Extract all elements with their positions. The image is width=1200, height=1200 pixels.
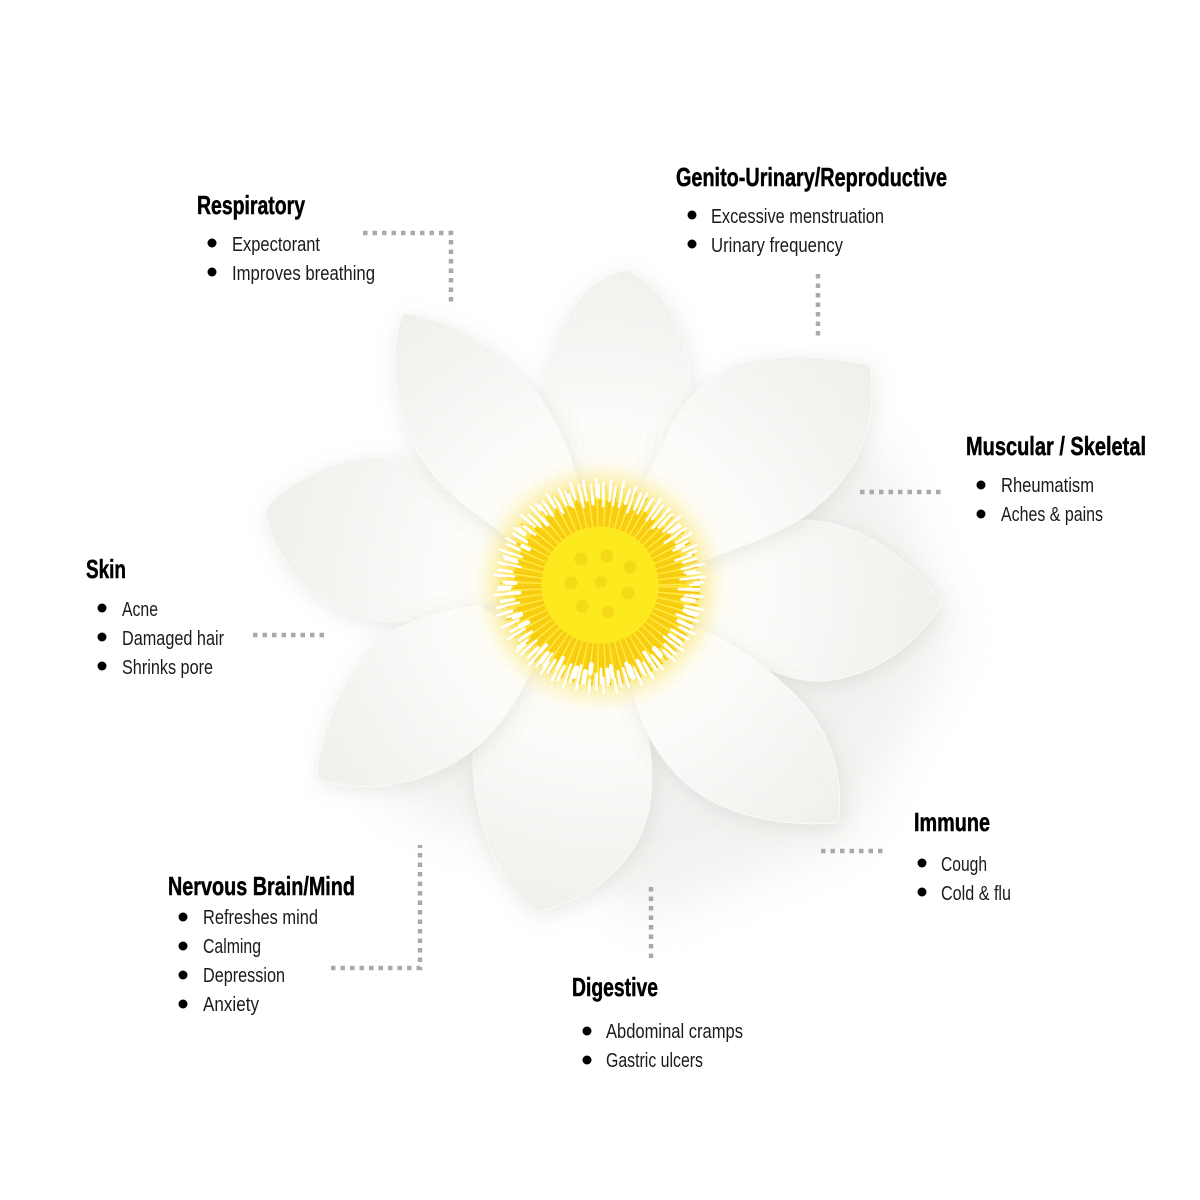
connector: immune	[821, 849, 884, 853]
stamen glow	[472, 458, 728, 714]
panel: skin: Shrinks pore	[122, 657, 213, 679]
panel: respiratory: Expectorant	[232, 234, 320, 256]
panel: digestive: Abdominal cramps	[606, 1021, 743, 1043]
panel: muscular skeletal: Rheumatism	[1001, 475, 1094, 497]
panel: nervous: Anxiety	[203, 994, 259, 1016]
panel: respiratory	[197, 190, 375, 285]
panel: nervous: Refreshes mind	[203, 907, 318, 929]
panel: genito-urinary: Genito-Urinary/Reproductive	[676, 162, 947, 192]
panel: muscular skeletal: Aches & pains	[1001, 504, 1103, 526]
panel: digestive: Gastric ulcers	[606, 1050, 703, 1072]
yellow stamens	[521, 507, 679, 665]
cast shadow	[380, 440, 955, 920]
connector: nervous	[331, 845, 420, 968]
panel: muscular skeletal: Muscular / Skeletal	[966, 431, 1146, 461]
back petal: top	[545, 270, 691, 510]
front petal: lower left	[317, 605, 540, 786]
panel: immune: Cold & flu	[941, 883, 1011, 905]
back petal: left	[265, 457, 530, 622]
panel: skin	[86, 554, 224, 679]
panel: genito-urinary: Excessive menstruation	[711, 206, 884, 228]
panel: immune: Cough	[941, 854, 987, 876]
panel: nervous	[168, 871, 355, 1016]
panel: immune	[914, 807, 1011, 905]
panel: muscular skeletal	[966, 431, 1146, 526]
connector: digestive	[649, 887, 653, 958]
white stamen tips	[457, 443, 742, 728]
panel: respiratory: Improves breathing	[232, 263, 375, 285]
connector: muscular skeletal	[860, 490, 942, 494]
panel: genito-urinary	[676, 162, 947, 257]
panel: immune: Immune	[914, 807, 990, 837]
front petal: upper left	[395, 313, 580, 538]
panel: respiratory: Respiratory	[197, 190, 305, 220]
front petal: lower right	[630, 625, 840, 824]
seed pod	[542, 526, 658, 644]
panel: digestive	[572, 972, 743, 1072]
panel: nervous: Nervous Brain/Mind	[168, 871, 355, 901]
panel: skin: Damaged hair	[122, 628, 224, 650]
panel: genito-urinary: Urinary frequency	[711, 235, 843, 257]
connector: genito-urinary	[816, 274, 820, 337]
panel: nervous: Depression	[203, 965, 285, 987]
panel: skin: Acne	[122, 599, 158, 621]
panel: digestive: Digestive	[572, 972, 658, 1002]
panel: nervous: Calming	[203, 936, 261, 958]
front petal: upper right	[630, 357, 872, 562]
panel: skin: Skin	[86, 554, 126, 584]
pod holes	[564, 550, 636, 618]
connector: respiratory	[363, 233, 451, 305]
back petal: bottom	[473, 660, 652, 912]
back petal: right	[690, 520, 942, 681]
flower	[265, 270, 955, 920]
connector: skin	[253, 633, 324, 637]
